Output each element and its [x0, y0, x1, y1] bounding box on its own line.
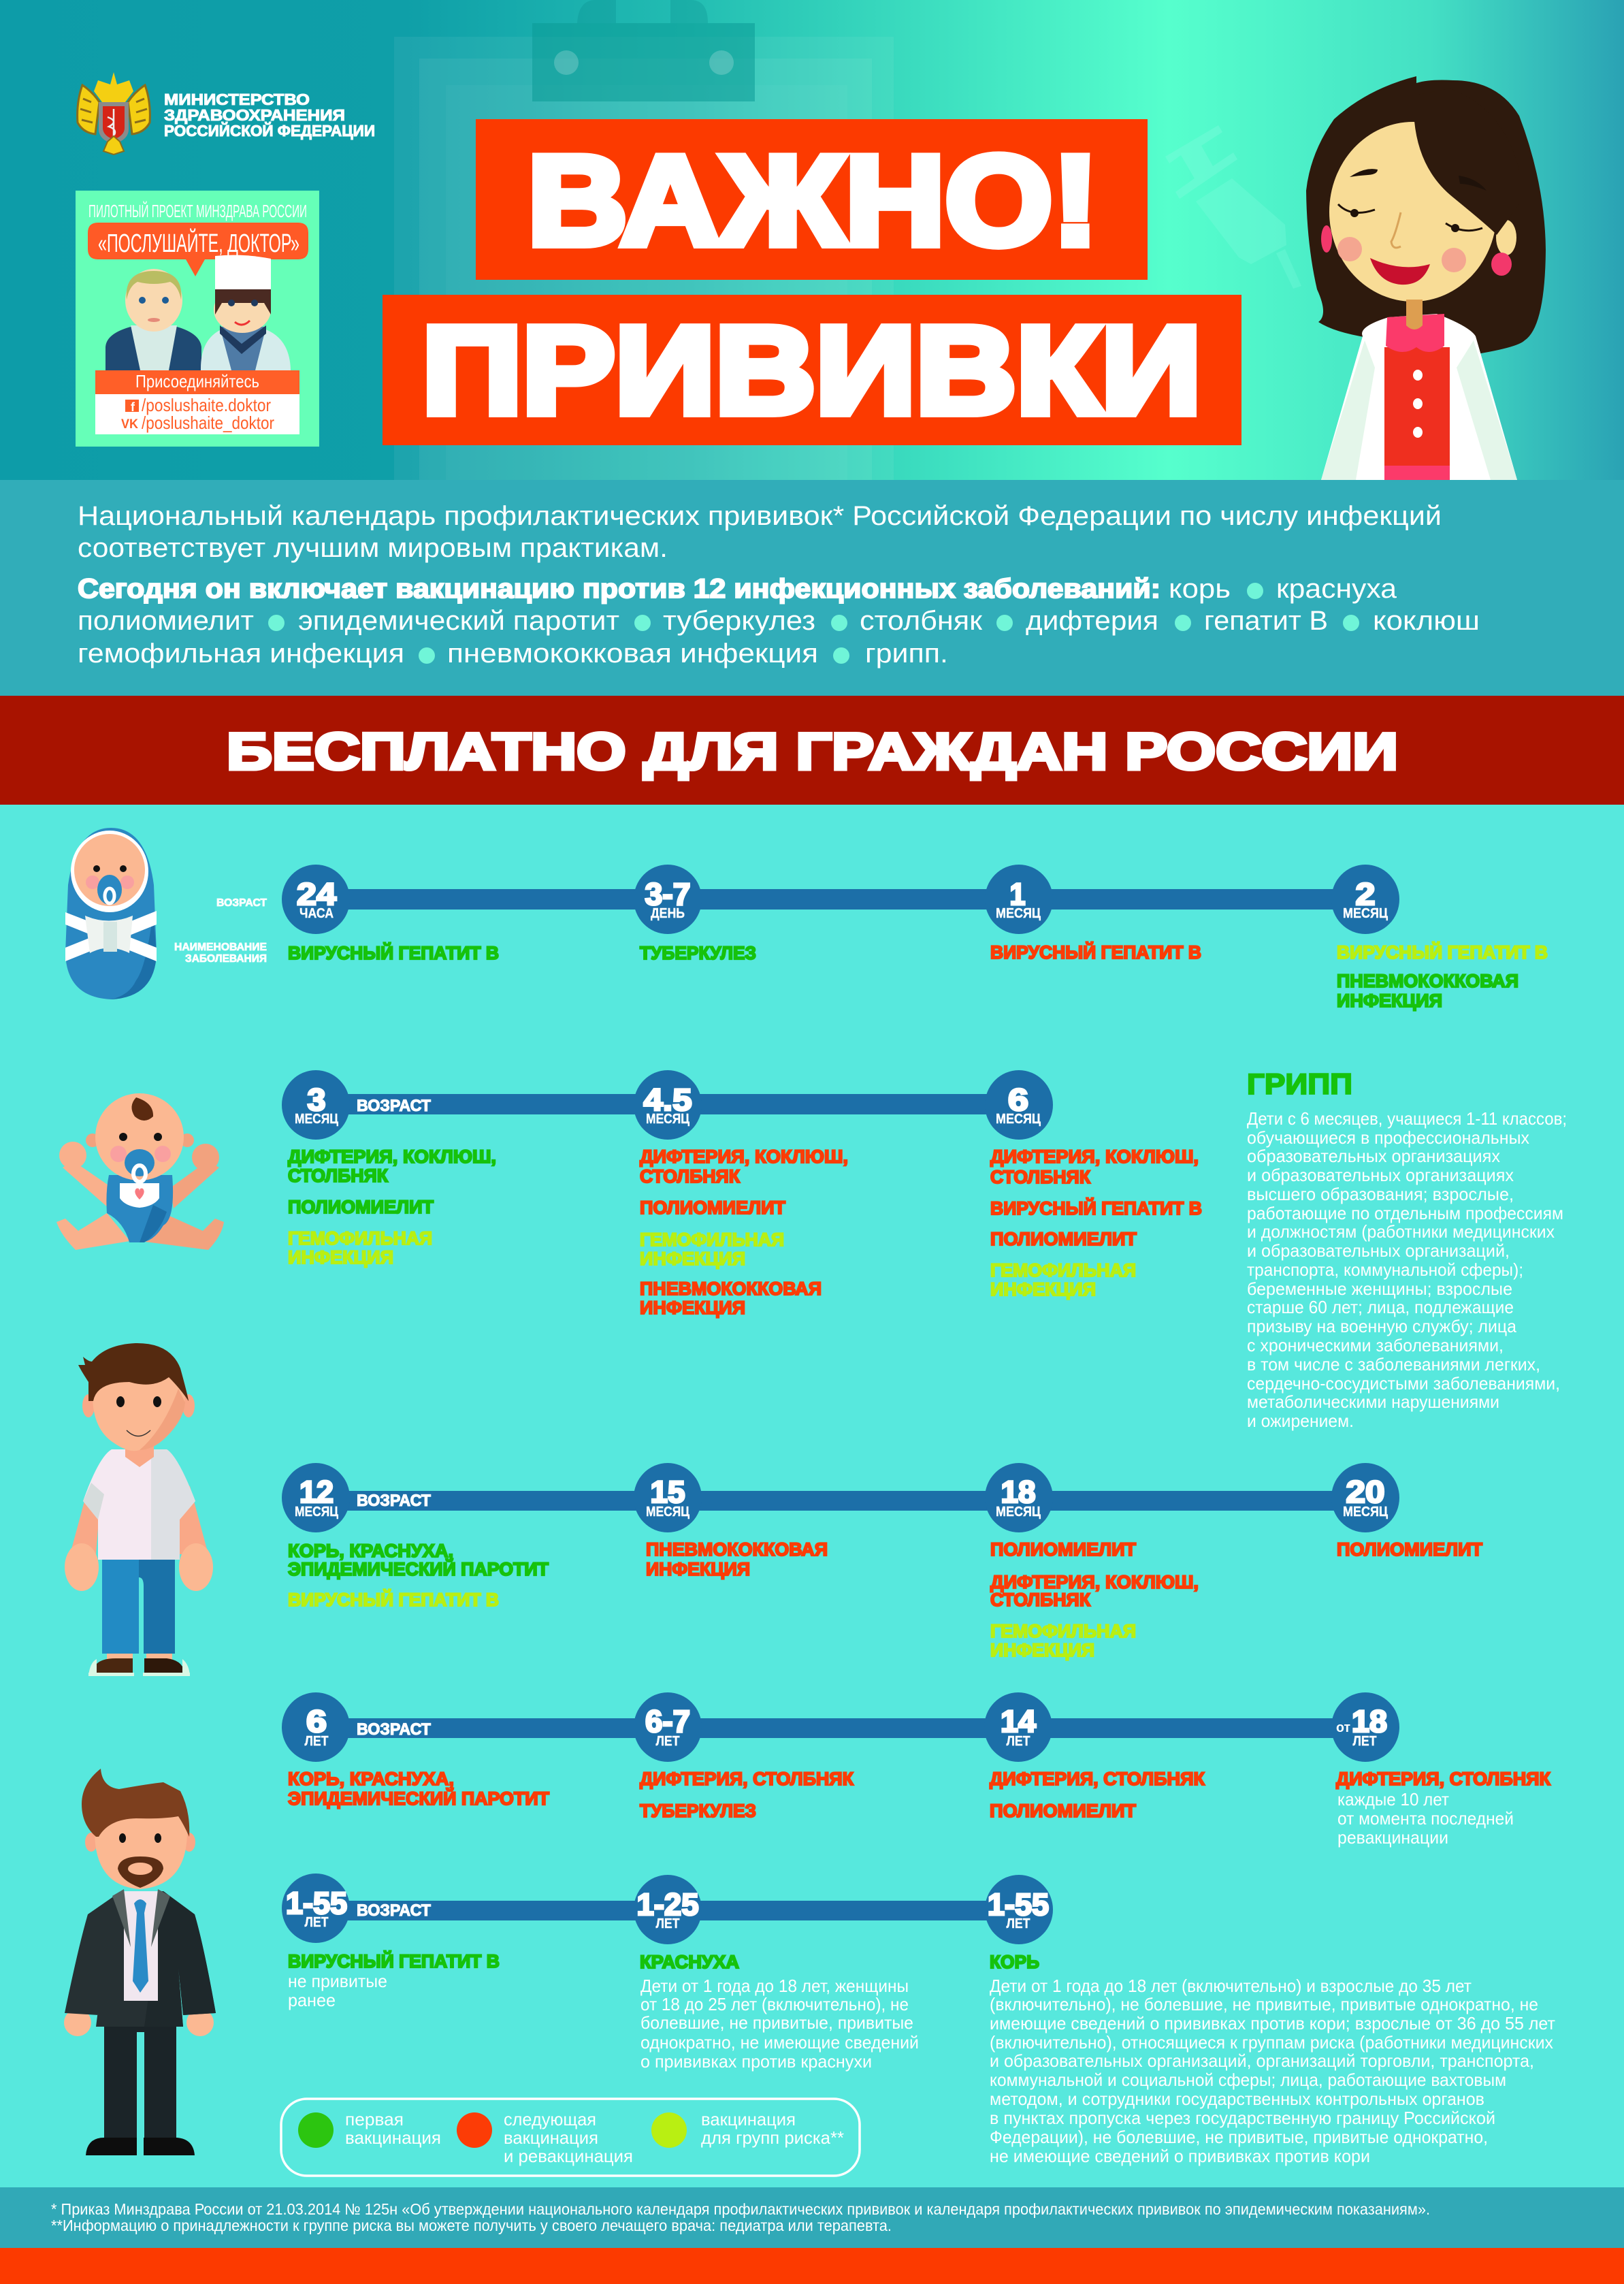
flu description: образовательных организациях	[1247, 1146, 1500, 1166]
note: hepatitis B: не привитые	[288, 1971, 387, 1991]
ministry name: ЗДРАВООХРАНЕНИЯ	[164, 106, 345, 124]
stop: 1-25 years: 1-25	[637, 1887, 698, 1922]
stop: 3 months	[282, 1070, 350, 1140]
diseases: 6 years: ЭПИДЕМИЧЕСКИЙ ПАРОТИТ	[288, 1788, 549, 1809]
row caption: age: ВОЗРАСТ	[216, 897, 267, 909]
diseases: 3 months: СТОЛБНЯК	[288, 1165, 389, 1186]
diseases	[288, 942, 1548, 1011]
stop: 3-7 days: 3-7	[645, 877, 690, 912]
legend item: first vaccination: первая	[345, 2109, 404, 2129]
stop: 12 months	[282, 1463, 350, 1532]
flu description: старше 60 лет; лица, подлежащие	[1247, 1297, 1514, 1317]
stop: 4.5 months: МЕСЯЦ	[646, 1112, 689, 1127]
flu description: беременные женщины; взрослые	[1247, 1278, 1512, 1299]
timeline bar	[316, 1094, 1019, 1114]
list of infections: корь	[1169, 574, 1231, 604]
stop: 2 months	[1331, 865, 1399, 934]
stop: 24 hours: 24	[297, 877, 336, 912]
icon: doctor	[201, 255, 291, 370]
note: rubella: КРАСНУХА	[640, 1952, 739, 1972]
stop: 6 years: ЛЕТ	[305, 1734, 328, 1749]
flu description: и ожирением.	[1247, 1411, 1354, 1431]
note: measles: (включительно), не болевшие, не привитые, привитые однократно, не	[990, 1994, 1538, 2014]
diseases: 12 months: КОРЬ, КРАСНУХА,	[288, 1541, 453, 1561]
diseases: from 18 years: от момента последней	[1337, 1808, 1514, 1829]
stop: 24 hours: ЧАСА	[299, 906, 334, 921]
note: measles: и образовательных организаций, организаций торговли, транспорта,	[990, 2050, 1534, 2071]
diseases: 3 months: ИНФЕКЦИЯ	[288, 1247, 393, 1268]
ministry name	[164, 91, 375, 140]
diseases: 4.5 months: ГЕМОФИЛЬНАЯ	[640, 1229, 784, 1250]
stop: 1 month	[985, 865, 1053, 934]
diseases: ВИРУСНЫЙ ГЕПАТИТ В	[1337, 942, 1548, 963]
icon: ghost syringe	[1165, 125, 1301, 289]
legend item: next vaccination: и ревакцинация	[504, 2146, 633, 2166]
note: measles: КОРЬ	[990, 1952, 1039, 1972]
flu description: Дети с 6 месяцев, учащиеся 1-11 классов;	[1247, 1108, 1567, 1129]
stop: 1-55 years measles	[985, 1875, 1053, 1944]
note: measles: методом, и сотрудники государственных контрольных органов	[990, 2089, 1484, 2109]
intro line: Национальный календарь профилактических прививок* Российской Федерации по числу инфекций	[78, 501, 1442, 531]
diseases: 6-7 years: ТУБЕРКУЛЕЗ	[640, 1801, 756, 1821]
diseases: 4.5 months: ДИФТЕРИЯ, КОКЛЮШ,	[640, 1146, 848, 1167]
flu description: и образовательных организациях	[1247, 1165, 1514, 1185]
legend item: next vaccination	[457, 2109, 633, 2166]
diseases: 6-7 years	[640, 1769, 854, 1821]
stop: 4.5 months: 4.5	[644, 1082, 692, 1117]
flu description: призыву на военную службу; лица	[1247, 1316, 1517, 1336]
diseases: 6 years: КОРЬ, КРАСНУХА,	[288, 1769, 454, 1789]
panel: pilot project card	[76, 191, 319, 447]
join band: Присоединяйтесь	[135, 371, 259, 391]
panel: footnotes: * Приказ Минздрава России от 21.03.2014 № 125н «Об утверждении национального календаря профилактических прививок и календаря профилактических прививок по эпидемическим показаниям».	[51, 2200, 1430, 2218]
join band	[95, 370, 299, 394]
timeline: 3-6 months row	[282, 1070, 1202, 1318]
illustration: swaddled newborn	[65, 828, 157, 999]
diseases: 6-7 years: ДИФТЕРИЯ, СТОЛБНЯК	[640, 1769, 854, 1789]
diseases: 18 months: ГЕМОФИЛЬНАЯ	[990, 1621, 1136, 1641]
stop: 14 years: ЛЕТ	[1006, 1734, 1030, 1749]
note: measles: Дети от 1 года до 18 лет (включительно) и взрослые до 35 лет	[990, 1976, 1472, 1996]
diseases: 18 months: ДИФТЕРИЯ, КОКЛЮШ,	[990, 1572, 1199, 1592]
stop: 3 months: 3	[308, 1082, 325, 1117]
row caption: disease name: НАИМЕНОВАНИЕ	[174, 942, 267, 953]
bottom orange strip	[0, 2248, 1624, 2284]
diseases: 4.5 months: ИНФЕКЦИЯ	[640, 1298, 745, 1318]
legend item: risk groups: вакцинация	[701, 2109, 796, 2129]
list of infections: пневмококковая инфекция	[447, 639, 818, 669]
stop: 4.5 months	[634, 1070, 702, 1140]
speech bubble: «ПОСЛУШАЙТЕ, ДОКТОР»	[98, 227, 299, 258]
list of infections: туберкулез	[663, 606, 815, 636]
diseases: 15 months: ИНФЕКЦИЯ	[646, 1559, 750, 1579]
banner: free for citizens	[0, 696, 1624, 805]
diseases: ТУБЕРКУЛЕЗ	[640, 943, 756, 963]
diseases: ВИРУСНЫЙ ГЕПАТИТ В	[288, 942, 499, 963]
list of infections: эпидемический паротит	[298, 606, 619, 636]
legend item: risk groups	[651, 2109, 844, 2148]
list of infections: столбняк	[860, 606, 983, 636]
note: hepatitis B: ВИРУСНЫЙ ГЕПАТИТ В	[288, 1950, 500, 1972]
legend item: first vaccination: вакцинация	[345, 2127, 441, 2148]
flu description: в том числе с заболеваниями легких,	[1247, 1354, 1540, 1374]
diseases: 6 months: ПОЛИОМИЕЛИТ	[990, 1229, 1137, 1249]
diseases: 15 months	[646, 1539, 828, 1579]
stop: 6 months	[985, 1070, 1053, 1140]
stop: 15 months: 15	[651, 1475, 685, 1509]
list of infections: гемофильная инфекция	[78, 639, 404, 669]
timeline bar	[316, 1718, 1365, 1738]
timeline: 12-20 months row	[282, 1463, 1483, 1660]
flu description: высшего образования; взрослые,	[1247, 1184, 1514, 1204]
diseases: 12 months	[288, 1541, 549, 1610]
flu description: обучающиеся в профессиональных	[1247, 1127, 1529, 1148]
age caption: ВОЗРАСТ	[357, 1492, 431, 1510]
panel: flu	[1247, 1068, 1567, 1431]
timeline bar	[316, 1491, 1365, 1511]
stop: 6-7 years	[634, 1692, 702, 1762]
stop: 18 months: 18	[1001, 1475, 1036, 1509]
stop: from 18 years: от	[1336, 1720, 1350, 1735]
title: ПРИВИВКИ: ПРИВИВКИ	[422, 300, 1201, 440]
diseases: from 18 years: каждые 10 лет	[1337, 1789, 1449, 1809]
stop: 1-25 years	[634, 1875, 702, 1944]
diseases: 3 months: ПОЛИОМИЕЛИТ	[288, 1197, 434, 1217]
note: measles	[990, 1952, 1555, 2166]
diseases: 6 months: СТОЛБНЯК	[990, 1167, 1091, 1187]
flu description: метаболическими нарушениями	[1247, 1392, 1499, 1412]
stop: 20 months: МЕСЯЦ	[1343, 1505, 1388, 1519]
diseases: from 18 years: ревакцинации	[1337, 1827, 1448, 1848]
diseases: 15 months: ПНЕВМОКОККОВАЯ	[646, 1539, 828, 1560]
note: hepatitis B: ранее	[288, 1990, 336, 2010]
stop: 15 months: МЕСЯЦ	[646, 1505, 689, 1519]
legend item: risk groups: для групп риска**	[701, 2127, 844, 2148]
list of infections	[78, 574, 1480, 669]
row caption: disease name: ЗАБОЛЕВАНИЯ	[185, 953, 267, 965]
diseases: 4.5 months: ПНЕВМОКОККОВАЯ	[640, 1278, 822, 1299]
stop: from 18 years: 18	[1352, 1704, 1387, 1739]
panel: footnotes	[0, 2187, 1624, 2249]
note: measles: не имеющие сведений о прививках против кори	[990, 2146, 1370, 2166]
stop: 1-55 years measles: ЛЕТ	[1006, 1916, 1030, 1931]
age caption: ВОЗРАСТ	[357, 1720, 431, 1739]
stop: 20 months: 20	[1346, 1475, 1384, 1509]
flu description: и должностям (работники медицинских	[1247, 1221, 1555, 1242]
age caption: ВОЗРАСТ	[357, 1901, 431, 1920]
diseases: 14 years: ДИФТЕРИЯ, СТОЛБНЯК	[990, 1769, 1205, 1789]
social links	[95, 394, 299, 434]
diseases: ВИРУСНЫЙ ГЕПАТИТ В	[990, 942, 1201, 963]
stop: from 18 years	[1331, 1692, 1399, 1762]
list of infections: краснуха	[1276, 574, 1397, 604]
legend item: first vaccination	[298, 2109, 441, 2148]
stop: 12 months: МЕСЯЦ	[295, 1505, 338, 1519]
note: rubella: от 18 до 25 лет (включительно), не	[640, 1994, 909, 2014]
timeline: newborn row	[174, 865, 1548, 1011]
stop: 12 months: 12	[299, 1475, 334, 1509]
note: measles: коммунальной и социальной сферы; лица, работающие вахтовым	[990, 2070, 1506, 2090]
panel: footnotes: **Информацию о принадлежности к группе риска вы можете получить у своего лечащего врача: педиатра или терапевта.	[51, 2217, 892, 2234]
stop: 20 months	[1331, 1463, 1399, 1532]
note: measles: в пунктах пропуска через государственную границу Российской	[990, 2108, 1495, 2128]
stop: 1 month: 1	[1010, 877, 1025, 912]
diseases: 3 months	[288, 1146, 496, 1268]
stop: 6 months: 6	[1008, 1082, 1028, 1117]
diseases: 18 months	[990, 1539, 1199, 1660]
diseases: 4.5 months: ИНФЕКЦИЯ	[640, 1249, 745, 1269]
illustration: boy	[65, 1343, 213, 1676]
flu description: сердечно-сосудистыми заболеваниями,	[1247, 1373, 1560, 1394]
diseases: 12 months: ВИРУСНЫЙ ГЕПАТИТ В	[288, 1589, 499, 1610]
note: measles: имеющие сведений о прививках против кори; взрослые от 36 до 55 лет	[990, 2013, 1555, 2033]
flu description	[1247, 1108, 1567, 1431]
diseases: 18 months: ИНФЕКЦИЯ	[990, 1640, 1094, 1660]
flu heading: ГРИПП	[1247, 1068, 1352, 1101]
stop: 15 months	[634, 1463, 702, 1532]
stop: 1-55 years hepatitis: 1-55	[286, 1886, 347, 1920]
stop: 1-55 years measles: 1-55	[988, 1887, 1049, 1922]
list of infections: коклюш	[1373, 606, 1480, 636]
stop: 18 months	[985, 1463, 1053, 1532]
banner: free for citizens: БЕСПЛАТНО ДЛЯ ГРАЖДАН РОССИИ	[227, 723, 1398, 781]
diseases: 12 months: ЭПИДЕМИЧЕСКИЙ ПАРОТИТ	[288, 1558, 549, 1579]
card heading: ПИЛОТНЫЙ ПРОЕКТ МИНЗДРАВА РОССИИ	[88, 201, 307, 221]
stop: 24 hours	[282, 865, 350, 934]
stop: 1-25 years: ЛЕТ	[656, 1916, 679, 1931]
row caption: disease name	[174, 942, 267, 965]
diseases: from 18 years: ДИФТЕРИЯ, СТОЛБНЯК	[1336, 1769, 1551, 1789]
flu description: с хроническими заболеваниями,	[1247, 1335, 1504, 1355]
timeline: 6-18 years row	[282, 1692, 1551, 1848]
flu description: транспорта, коммунальной сферы);	[1247, 1259, 1523, 1280]
stop: 6 months: МЕСЯЦ	[996, 1112, 1041, 1127]
note: rubella: однократно, не имеющие сведений	[640, 2032, 919, 2053]
diseases: 6 months: ИНФЕКЦИЯ	[990, 1279, 1096, 1300]
diseases: 4.5 months: ПОЛИОМИЕЛИТ	[640, 1197, 786, 1218]
timeline: 1-55 years row	[282, 1873, 1555, 2166]
stop: 6 years: 6	[306, 1704, 327, 1739]
age caption: ВОЗРАСТ	[357, 1097, 431, 1115]
bold lead sentence: Сегодня он включает вакцинацию против 12 инфекционных заболеваний:	[78, 574, 1160, 604]
diseases: 4.5 months: СТОЛБНЯК	[640, 1166, 741, 1187]
social links: /poslushaite.doktor	[142, 395, 271, 415]
stop: 3 months: МЕСЯЦ	[295, 1112, 338, 1127]
note: measles: (включительно), относящиеся к группам риска (работники медицинских	[990, 2032, 1553, 2053]
stop: 6-7 years: ЛЕТ	[656, 1734, 679, 1749]
ministry name: РОССИЙСКОЙ ФЕДЕРАЦИИ	[164, 121, 375, 140]
stop: 1-55 years hepatitis	[282, 1873, 350, 1943]
stop: 2 months: 2	[1356, 877, 1375, 912]
diseases: 6 years	[288, 1769, 549, 1809]
legend	[281, 2099, 860, 2176]
illustration: woman doctor	[1306, 76, 1546, 481]
icon: patient	[105, 269, 201, 370]
icon: ghost clipboard	[394, 0, 894, 481]
diseases: 6 months: ГЕМОФИЛЬНАЯ	[990, 1260, 1136, 1281]
stop: 3-7 days	[634, 865, 702, 934]
note: rubella: о прививках против краснухи	[640, 2051, 872, 2072]
list of infections: дифтерия	[1026, 606, 1158, 636]
social links: VK	[121, 417, 138, 432]
diseases: ПНЕВМОКОККОВАЯ	[1337, 971, 1519, 991]
note: hepatitis B	[288, 1950, 500, 2010]
diseases: ИНФЕКЦИЯ	[1337, 991, 1442, 1011]
stop: 18 months: МЕСЯЦ	[996, 1505, 1041, 1519]
diseases: 18 months: ПОЛИОМИЕЛИТ	[990, 1539, 1137, 1560]
diseases: 3 months: ГЕМОФИЛЬНАЯ	[288, 1228, 432, 1249]
title: ВАЖНО!	[476, 119, 1148, 280]
note: rubella: Дети от 1 года до 18 лет, женщины	[640, 1976, 909, 1996]
stop: 1-55 years hepatitis: ЛЕТ	[305, 1915, 328, 1930]
timeline bar	[316, 1901, 1019, 1920]
note: rubella	[640, 1952, 919, 2072]
intro line 2: соответствует лучшим мировым практикам.	[78, 533, 668, 563]
diseases: 4.5 months	[640, 1146, 848, 1318]
stop: 1 month: МЕСЯЦ	[996, 906, 1041, 921]
illustration: adult man	[64, 1769, 216, 2155]
legend item: next vaccination: вакцинация	[504, 2127, 598, 2148]
diseases: 6 months	[990, 1146, 1202, 1300]
social links: f	[131, 400, 135, 414]
speech bubble	[88, 223, 308, 276]
stop: 3-7 days: ДЕНЬ	[651, 906, 685, 921]
note: rubella: болевшие, не привитые, привитые	[640, 2012, 913, 2033]
legend item: next vaccination: следующая	[504, 2109, 596, 2129]
stop: 2 months: МЕСЯЦ	[1343, 906, 1388, 921]
stop: 6 years	[282, 1692, 350, 1762]
stop: 6-7 years: 6-7	[645, 1704, 690, 1739]
panel: intro text	[0, 480, 1624, 696]
title: ВАЖНО!: ВАЖНО!	[527, 129, 1099, 272]
flu description: и образовательных организаций,	[1247, 1240, 1510, 1261]
diseases: 6 months: ВИРУСНЫЙ ГЕПАТИТ В	[990, 1197, 1202, 1219]
panel: header	[0, 0, 1624, 481]
note: measles: Федерации), не болевшие, не привитые, привитые однократно,	[990, 2127, 1488, 2147]
social links: /poslushaite_doktor	[142, 413, 274, 433]
diseases: 14 years: ПОЛИОМИЕЛИТ	[990, 1801, 1137, 1821]
list of infections: грипп.	[865, 639, 948, 669]
stop: from 18 years: ЛЕТ	[1353, 1734, 1376, 1749]
emblem: ministry coat of arms	[78, 72, 150, 155]
flu description: работающие по отдельным профессиям	[1247, 1203, 1563, 1223]
list of infections: полиомиелит	[78, 606, 254, 636]
diseases: 14 years	[990, 1769, 1205, 1821]
stop: 14 years: 14	[1001, 1704, 1036, 1739]
diseases: 20 months: ПОЛИОМИЕЛИТ	[1337, 1539, 1483, 1560]
timeline bar	[316, 889, 1365, 910]
diseases: 3 months: ДИФТЕРИЯ, КОКЛЮШ,	[288, 1146, 496, 1167]
list of infections: гепатит В	[1204, 606, 1328, 636]
diseases: 18 months: СТОЛБНЯК	[990, 1590, 1091, 1610]
illustration: sitting baby	[56, 1093, 224, 1250]
stop: 14 years	[984, 1692, 1052, 1762]
diseases: 6 months: ДИФТЕРИЯ, КОКЛЮШ,	[990, 1146, 1199, 1167]
diseases: from 18 years	[1336, 1769, 1551, 1848]
ministry name: МИНИСТЕРСТВО	[164, 91, 310, 108]
